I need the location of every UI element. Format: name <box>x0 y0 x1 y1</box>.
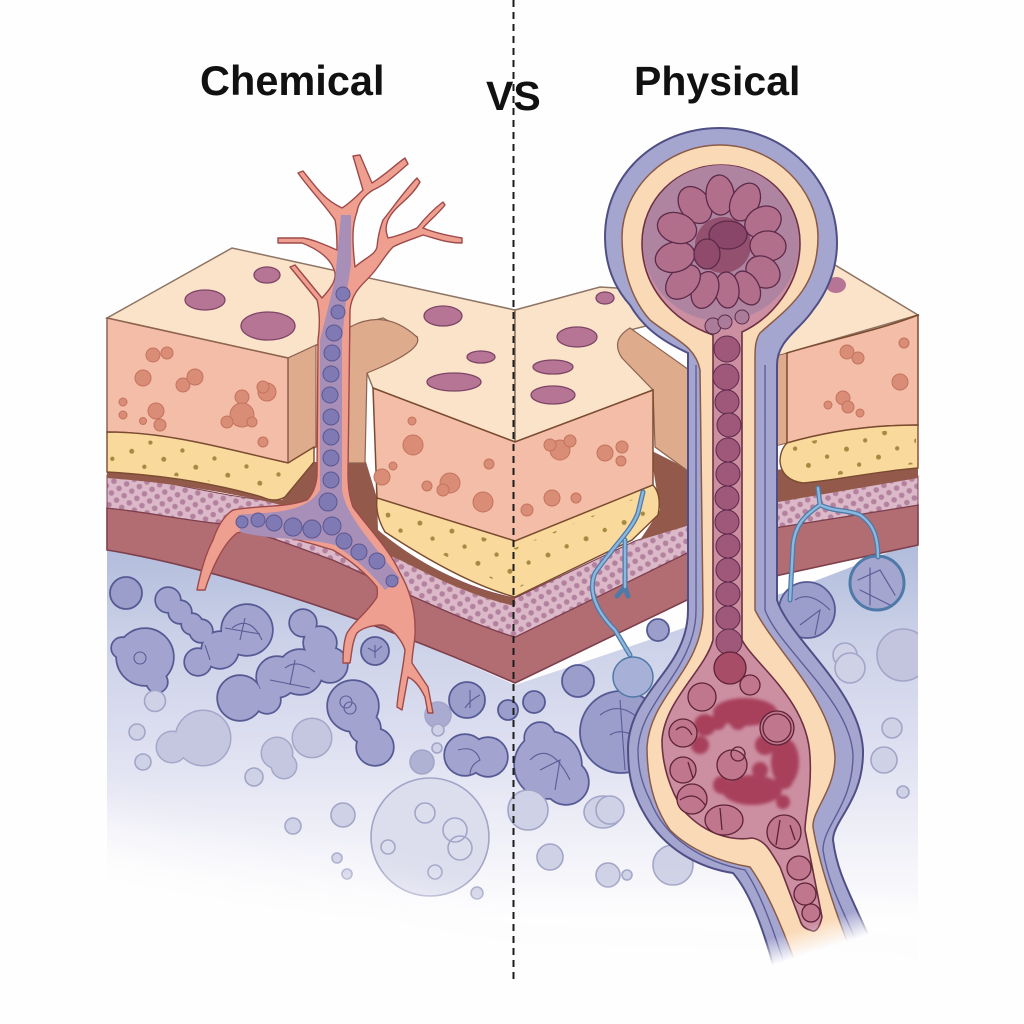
icon: centre blue nerve <box>592 492 653 697</box>
tube outer wall <box>605 128 885 975</box>
brown connective patch <box>107 450 918 606</box>
block top face <box>107 248 515 442</box>
panel: dotted purple layer <box>107 475 918 637</box>
right notch wall <box>618 328 692 474</box>
tube inner wall line <box>638 365 872 975</box>
bulb cells <box>669 652 820 922</box>
cell crack lines <box>134 597 830 790</box>
panel: centre skin block <box>373 287 692 597</box>
blotches <box>119 347 276 447</box>
wells <box>185 267 495 391</box>
faint cells <box>129 629 929 899</box>
panel: deep blue tissue layer with cells <box>107 546 918 900</box>
divider: dashed centre line <box>512 0 514 982</box>
right block side <box>760 353 787 450</box>
notch wall <box>345 319 418 463</box>
centre block top right <box>515 287 653 442</box>
yellow fat layer <box>107 432 314 500</box>
tube cream layer <box>622 145 860 975</box>
cells: strong row <box>110 577 835 773</box>
chart: chemical branching vessel <box>197 155 462 713</box>
icon: right blue nerve with cell <box>790 488 904 610</box>
right block top <box>760 250 918 365</box>
block side face <box>288 345 316 463</box>
rosette <box>652 174 787 312</box>
chart: physical bulb tube <box>605 128 885 975</box>
vessel lumen <box>238 215 400 590</box>
cell clusters <box>112 588 588 804</box>
faint cell clusters <box>157 711 331 778</box>
vesicle chain <box>236 287 398 587</box>
neck cell chain <box>705 310 749 655</box>
title: Physical: Physical <box>634 58 800 104</box>
centre blotches <box>374 417 628 516</box>
panel: right skin block <box>760 250 918 610</box>
centre block front faces <box>373 388 653 541</box>
title: VS: VS <box>486 73 541 119</box>
block front pink face <box>107 318 288 463</box>
centre yellow layer <box>377 485 659 597</box>
right block front <box>787 315 918 443</box>
panel: left skin block <box>107 248 515 500</box>
upper lumen fill <box>643 165 799 321</box>
vessel body <box>197 155 462 713</box>
panel: dark red dermis layer <box>107 505 918 683</box>
right yellow layer <box>780 425 918 483</box>
dark central mass <box>691 698 799 809</box>
centre wells <box>531 292 614 404</box>
right blotches <box>824 338 909 417</box>
title: Chemical: Chemical <box>200 57 385 104</box>
lumen <box>642 165 822 931</box>
